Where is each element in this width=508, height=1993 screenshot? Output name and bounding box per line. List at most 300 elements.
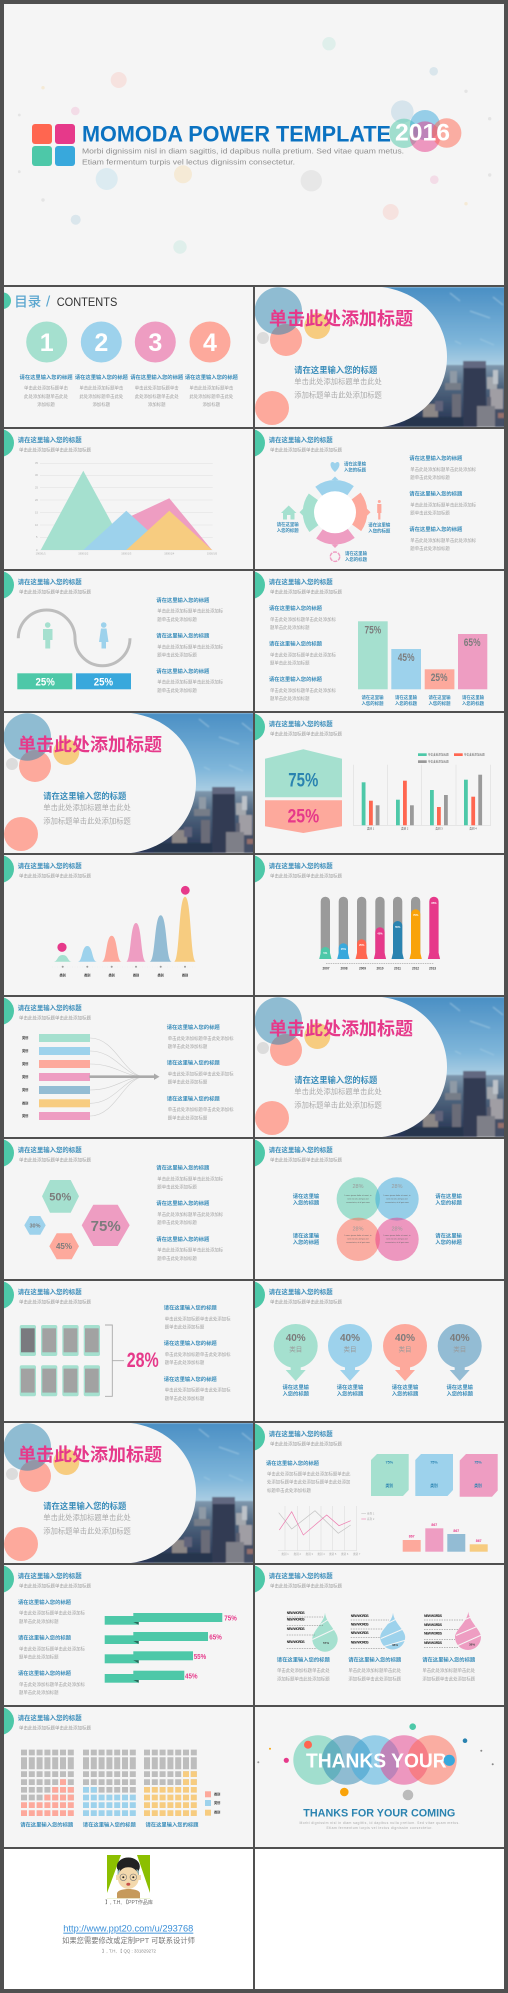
bar percentages: 65% [209, 1633, 222, 1642]
circle text: 28% [352, 1184, 364, 1190]
text block 2 [409, 490, 477, 516]
pill chart: 2007 [322, 966, 330, 970]
text block 1: 题单击此处添加标题 [270, 624, 310, 631]
slide heading [0, 1565, 91, 1593]
text block 1: 请在这里输入您的标题 [156, 1164, 210, 1172]
text block 3: 单击此处添加标题单击此处添加标 [19, 1681, 85, 1688]
slide heading: 请在这里输入您的标题 [18, 1145, 82, 1154]
small bar chart: 867 [409, 1534, 415, 1538]
cut-corner box 3: 类别 [474, 1483, 482, 1488]
ring labels: 入您的标题 [344, 466, 367, 474]
text block 3: 题单击此处添加标题 [19, 1689, 59, 1696]
circle text [345, 1184, 410, 1244]
contents item 3: 添加标题 [148, 401, 166, 408]
main title: MOMODA POWER TEMPLATE [82, 121, 391, 146]
drop caption 2: 添加标题单击此处添加标题 [348, 1675, 402, 1682]
text block 3: 题单击此处添加标题 [165, 1395, 205, 1402]
area chart [35, 461, 218, 556]
text block 1: 题单击此处添加标题 [157, 1184, 197, 1190]
hexagon 50%: 50% [49, 1192, 72, 1204]
contact note: 如果您需要修改或定制PPT 可联系设计师 [62, 1936, 195, 1945]
text block 3: 题单击此处添加标题 [168, 1114, 208, 1121]
text block 3 [167, 1094, 234, 1121]
cover text: 单击此处添加标题单击此处 [43, 1513, 132, 1522]
text block: 请在这里输入您的标题 [266, 1459, 320, 1467]
pill chart: 55% [395, 925, 401, 929]
logo squares [32, 124, 75, 166]
column chart: 75% [364, 624, 381, 636]
text block 2: 请在这里输入您的标题 [167, 1059, 220, 1067]
slide heading [237, 1281, 342, 1309]
pin 3: 入您的标题 [392, 1390, 419, 1398]
slide heading: 单击此处添加标题单击此处添加标题 [270, 446, 342, 454]
text block 1: 请在这里输入您的标题 [167, 1023, 220, 1031]
panel: hexagon slide [4, 1139, 253, 1279]
cover text: 添加标题单击此处添加标题 [43, 816, 132, 826]
column chart: 入您的标题 [429, 700, 451, 707]
slide heading: 单击此处添加标题单击此处添加标题 [270, 1582, 342, 1590]
slide heading: 单击此处添加标题单击此处添加标题 [270, 588, 342, 596]
contents item 2: 请在这里输入您的标题 [75, 373, 128, 381]
drop 1: NEW WORDS [287, 1640, 305, 1644]
contents item 3: 请在这里输入您的标题 [130, 373, 184, 381]
pin 3: 40% [395, 1333, 415, 1344]
pin 2 [328, 1324, 372, 1398]
text block 3: 题单击此处添加标题 [410, 545, 450, 552]
drop 2: NEW WORDS [351, 1631, 369, 1635]
slide heading [0, 1139, 91, 1167]
contents heading: / [46, 294, 51, 311]
drop 2: NEW WORDS [351, 1622, 369, 1626]
drop caption 1 [277, 1656, 330, 1682]
text block 2: 单击此处添加标题单击此处添加标 [270, 651, 336, 658]
ribbon bars [105, 1613, 222, 1683]
panel: designer credits [4, 1849, 253, 1989]
pill chart [319, 897, 440, 970]
cover text: 添加标题单击此处添加标题 [294, 1100, 383, 1110]
panel: area chart slide [4, 429, 253, 569]
circle labels: 入您的标题 [293, 1238, 320, 1246]
bell chart: 类别 [133, 972, 139, 978]
slide heading: 请在这里输入您的标题 [18, 861, 82, 870]
circle text: Lorem ipsum dolor sit amet, in [384, 1194, 410, 1197]
drop caption 3: 请在这里输入您的标题 [422, 1656, 476, 1664]
text block 2: 单击此处添加标题单击此处添加标 [410, 501, 477, 508]
numbered circles [26, 322, 231, 362]
slide heading [0, 855, 91, 883]
text block 3: 单击此处添加标题单击此处添加标 [270, 687, 336, 694]
slide heading [0, 571, 91, 599]
contents item 2 [75, 373, 128, 408]
cover text: 请在这里输入您的标题 [43, 791, 127, 801]
decorative faint dots [18, 37, 491, 254]
cut-corner box 1: 75% [385, 1460, 394, 1464]
panel: converging bars slide [4, 997, 253, 1137]
badge 25%: 25% [288, 806, 319, 827]
text block 1 [409, 454, 477, 481]
contents item 4: 添加标题 [203, 401, 221, 408]
waffle 1 [21, 1752, 74, 1813]
cover text: 请在这里输入您的标题 [43, 1501, 127, 1511]
area chart: 1900/1/3 [121, 552, 132, 556]
drop caption 1: 添加标题单击此处添加标题 [277, 1675, 330, 1682]
small bar chart: 867 [476, 1539, 482, 1543]
text block 1: 题单击此处添加标题 [165, 1324, 205, 1330]
ring labels: 请在这里输 [277, 521, 299, 528]
slide heading [237, 1139, 342, 1167]
cut-corner box 1: 类别 [386, 1483, 393, 1488]
icon: heart [331, 462, 339, 472]
text block 3: 单击此处添加标题单击此处添加标 [157, 1247, 224, 1254]
slide heading: 单击此处添加标题单击此处添加标题 [270, 1156, 342, 1164]
link text: http://www.ppt20.com/u/293768 [63, 1924, 193, 1935]
panel: wave people slide [4, 571, 253, 711]
text block 2: 请在这里输入您的标题 [269, 640, 323, 648]
slide heading: 请在这里输入您的标题 [269, 719, 333, 728]
text block 3: 题单击此处添加标题 [157, 1255, 197, 1262]
slide heading: 请在这里输入您的标题 [269, 1429, 333, 1438]
cut-corner box 2 [415, 1454, 453, 1496]
bar percentages: 55% [194, 1652, 206, 1661]
text block 1: 题单击此处添加标题 [157, 616, 197, 623]
category bars and connectors: 类别 [22, 1048, 28, 1053]
drop 2 [351, 1613, 406, 1650]
slide heading: 请在这里输入您的标题 [18, 1713, 82, 1722]
text block 3 [269, 675, 336, 702]
text block 2: 题单击此处添加标题 [270, 659, 310, 666]
line chart: 类别 1 [281, 1552, 289, 1556]
small bar chart [403, 1523, 488, 1552]
circle labels: 请在这里输 [435, 1192, 462, 1200]
drop 3: NEW WORDS [424, 1641, 443, 1645]
numbered circles: 4 [203, 329, 217, 357]
area chart: 10 [35, 523, 38, 527]
hexagon 30% [24, 1216, 46, 1235]
grouped bar chart: 类别 2 [401, 827, 409, 831]
area chart: 1900/1/5 [207, 552, 218, 556]
slide heading [0, 429, 91, 457]
arrow [89, 1074, 160, 1080]
text block 2: 题单击此处添加标题 [157, 1219, 197, 1226]
thanks title: THANKS YOUR [306, 1750, 447, 1772]
avatar [107, 1855, 150, 1898]
text block 2: 题单击此处添加标题 [157, 651, 197, 658]
area chart: 5 [36, 535, 38, 539]
pill chart: 2010 [376, 966, 384, 970]
text block 3: 请在这里输入您的标题 [18, 1669, 72, 1677]
big percentage: 28% [127, 1349, 159, 1372]
contents item 1: 请在这里输入您的标题 [20, 373, 73, 381]
drop 2: NEW WORDS [351, 1614, 369, 1618]
text block 1: 题单击此处添加标题 [410, 474, 450, 481]
pill chart: 85% [431, 901, 437, 905]
text block 3: 单击此处添加标题单击此处添加标 [168, 1106, 234, 1113]
category bars and connectors: 类别 [22, 1113, 28, 1118]
text block 2 [167, 1059, 234, 1086]
contents item 3: 单击此处添加标题单击 [135, 384, 179, 391]
drop caption 2 [348, 1656, 402, 1682]
drop 2: NEW WORDS [351, 1640, 369, 1644]
panel: section cover 4 [4, 1423, 253, 1563]
waffle captions: 请在这里输入您的标题 [20, 1821, 74, 1829]
slide heading: 单击此处添加标题单击此处添加标题 [19, 588, 91, 596]
column chart: 入您的标题 [362, 700, 384, 707]
slide heading [0, 997, 91, 1025]
slide heading: 请在这里输入您的标题 [269, 1145, 333, 1154]
waffle captions [20, 1821, 199, 1829]
pin 4: 入您的标题 [446, 1390, 474, 1398]
waffle 2 [83, 1752, 136, 1813]
text block 1: 单击此处添加标题单击此处添加标 [165, 1315, 231, 1322]
category bars and connectors: 类别 [22, 1074, 28, 1079]
text block 1 [18, 1598, 85, 1625]
subtitle [82, 148, 404, 166]
contents item 4: 单击此处添加标题单击 [189, 384, 234, 391]
drop caption 3 [422, 1656, 476, 1682]
area chart: 25 [35, 486, 38, 490]
panel: bell chart slide [4, 855, 253, 995]
text block 1: 题单击此处添加标题 [168, 1043, 208, 1050]
numbered circles: 1 [40, 329, 54, 357]
text block 2: 单击此处添加标题单击此处添加标 [19, 1645, 85, 1652]
pin 4: 40% [450, 1333, 470, 1344]
pill chart: 25% [359, 943, 365, 947]
icon: green person [43, 622, 52, 648]
text block 1: 单击此处添加标题单击此处添加标 [168, 1035, 234, 1042]
cover text [294, 1075, 383, 1110]
text block 3 [156, 667, 224, 694]
cover text [43, 791, 132, 826]
slide heading: 请在这里输入您的标题 [18, 1287, 82, 1296]
circle labels: 请在这里输 [293, 1192, 320, 1200]
text block 2: 题单击此处添加标题 [165, 1359, 205, 1366]
contents item 1: 单击此处添加标题单击 [24, 384, 69, 391]
text block 1 [269, 604, 336, 631]
circle text: 28% [352, 1226, 364, 1232]
waffle legend: 类别 [214, 1792, 220, 1797]
drop 3 [424, 1612, 482, 1650]
slide heading: 单击此处添加标题单击此处添加标题 [19, 1298, 91, 1306]
drop caption 3: 单击此处添加标题单击此处 [422, 1667, 476, 1674]
icon: blue person [99, 622, 108, 648]
cover text: 单击此处添加标题单击此处 [294, 1087, 383, 1096]
circle labels: 入您的标题 [435, 1198, 462, 1206]
chart legend: 单击此处添加标题 [464, 753, 485, 757]
column chart: 65% [464, 637, 481, 649]
contents item 2: 此处添加标题单击此处 [79, 393, 124, 400]
panel: water drops slide [255, 1565, 504, 1705]
circle text: Lorem ipsum dolor sit amet, in [345, 1194, 371, 1197]
drop caption 2: 单击此处添加标题单击此处 [348, 1667, 402, 1674]
drop 3: 38% [469, 1642, 475, 1646]
text block 2 [156, 632, 224, 658]
city photo [104, 713, 254, 853]
bell chart: 类别 [182, 972, 188, 978]
pill chart: 5% [323, 951, 328, 955]
hexagon 30%: 30% [29, 1223, 41, 1229]
circle text: consectetur, ut id quis sem [385, 1241, 409, 1244]
drop 1 [287, 1611, 338, 1652]
contents item 2: 添加标题 [93, 401, 111, 408]
waffle legend: 类别 [214, 1800, 220, 1805]
circle labels [293, 1192, 462, 1246]
badge 75%: 75% [288, 770, 318, 791]
text block 3: 请在这里输入您的标题 [269, 675, 323, 683]
slide heading: 单击此处添加标题单击此处添加标题 [19, 446, 91, 454]
year circles [389, 100, 461, 152]
line chart: 类别 7 [353, 1552, 361, 1556]
text block 3: 请在这里输入您的标题 [156, 1235, 210, 1243]
slide heading [237, 1565, 342, 1593]
cover text [294, 365, 383, 400]
subtitle: Etiam fermentum turpis vel lectus dignissim consectetur. [82, 159, 295, 166]
waffle captions: 请在这里输入您的标题 [83, 1821, 136, 1829]
slide heading: 请在这里输入您的标题 [269, 1287, 333, 1296]
slide heading [237, 713, 342, 741]
text block 1 [164, 1304, 231, 1330]
slide heading [237, 429, 342, 457]
text block 2 [18, 1634, 85, 1660]
text block 2: 单击此处添加标题单击此处添加标 [168, 1070, 234, 1077]
text block 3: 请在这里输入您的标题 [164, 1375, 217, 1383]
text block 3 [156, 1235, 224, 1262]
panel: thanks slide [255, 1707, 504, 1847]
white curved panel [4, 713, 196, 853]
slide heading: 单击此处添加标题单击此处添加标题 [19, 872, 91, 880]
thanks body: Morbi dignissim nisl in diam sagittis, id dapibus nulla pretium. Sed vitae quam metus. [300, 1821, 460, 1825]
text block [266, 1459, 351, 1494]
thanks body: Etiam fermentum turpis vel lectus dignissim consectetur. [326, 1826, 433, 1830]
slide heading: 单击此处添加标题单击此处添加标题 [270, 1440, 342, 1448]
chart legend [418, 753, 485, 764]
panel: section cover 1 [255, 287, 504, 427]
text block 1: 单击此处添加标题单击此处添加标 [410, 466, 477, 473]
area chart: 1900/1/4 [164, 552, 175, 556]
contents item 2: 单击此处添加标题单击 [79, 384, 124, 391]
bar percentages: 45% [185, 1671, 198, 1680]
slide heading: 单击此处添加标题单击此处添加标题 [19, 1156, 91, 1164]
overlapping circles [337, 1177, 419, 1261]
pin 3 [383, 1324, 427, 1398]
text block 2: 请在这里输入您的标题 [156, 1199, 210, 1207]
category bars and connectors: 类别 [22, 1035, 28, 1040]
contents item 4 [185, 373, 238, 408]
white curved panel [255, 287, 447, 427]
cover title: 单击此处添加标题 [18, 1445, 162, 1465]
category bars and connectors: 类别 [22, 1061, 28, 1066]
slide heading: 单击此处添加标题单击此处添加标题 [270, 1298, 342, 1306]
ring labels: 请在这里输 [344, 460, 367, 468]
text block: 处添加标题单击此处添加标题单击此处添加 [267, 1479, 350, 1486]
slide heading [0, 1707, 91, 1735]
numbered circles: 3 [148, 329, 162, 357]
circle labels: 请在这里输 [435, 1231, 462, 1239]
ring labels [277, 460, 391, 563]
year: 2016 [395, 120, 450, 146]
contents item 1 [20, 373, 73, 408]
drop 1: NEW WORDS [287, 1611, 305, 1615]
text block 1: 单击此处添加标题单击此处添加标 [270, 616, 336, 623]
pill chart: 2012 [412, 966, 419, 970]
slide heading: 请在这里输入您的标题 [269, 861, 333, 870]
cover circles [255, 287, 330, 425]
slide heading: 单击此处添加标题单击此处添加标题 [270, 730, 342, 738]
hexagon 45% [49, 1233, 79, 1259]
text block 3: 请在这里输入您的标题 [156, 667, 210, 675]
drop 1: NEW WORDS [287, 1618, 305, 1622]
cover circles [4, 713, 79, 851]
cut-corner box 2: 75% [430, 1460, 438, 1464]
qq line: 】, T.H, 【 QQ : 331829272 [102, 1948, 157, 1954]
circle text: 28% [391, 1226, 403, 1232]
pill chart: 2011 [394, 966, 401, 970]
circle text: Lorem ipsum dolor sit amet, in [345, 1234, 371, 1237]
slide heading: 单击此处添加标题单击此处添加标题 [270, 872, 342, 880]
waffle legend [205, 1791, 220, 1816]
slide heading: 请在这里输入您的标题 [18, 577, 82, 586]
circle text: sem nisi id a tempus est [386, 1238, 408, 1240]
text block 1: 请在这里输入您的标题 [269, 604, 323, 612]
circle labels: 入您的标题 [293, 1198, 320, 1206]
circle text: sem nisi id a tempus est [347, 1238, 369, 1240]
thanks subtitle: THANKS FOR YOUR COMING [303, 1807, 455, 1819]
line chart [278, 1506, 375, 1556]
text block 2 [156, 1199, 224, 1226]
city photo [104, 1423, 254, 1563]
text block 2: 题单击此处添加标题 [168, 1078, 208, 1085]
ring labels: 请在这里输 [368, 522, 391, 528]
pill chart: 40% [377, 932, 383, 936]
slide heading [237, 855, 342, 883]
drop 1: NEW WORDS [287, 1627, 305, 1631]
text block 3: 单击此处添加标题单击此处添加标 [165, 1387, 231, 1394]
panel: contents [4, 287, 253, 427]
city photo [355, 997, 505, 1137]
contents item 1: 添加标题 [37, 401, 55, 408]
pin 1: 入您的标题 [282, 1390, 310, 1398]
pin 1: 40% [286, 1333, 306, 1344]
column chart [358, 621, 487, 707]
panel: phones slide [4, 1281, 253, 1421]
contents item 1: 此处添加标题单击此处 [24, 393, 69, 400]
drop 3: NEW WORDS [424, 1632, 443, 1636]
slide heading: 请在这里输入您的标题 [269, 577, 333, 586]
slide heading: 请在这里输入您的标题 [18, 435, 82, 444]
text block: 单击此处添加标题单击此处添加标题单击此 [267, 1470, 351, 1477]
subtitle: Morbi dignissim nisl in diam sagittis, id dapibus nulla pretium. Sed vitae quam metus. [82, 148, 404, 156]
pill chart: 2008 [340, 966, 348, 970]
cover title: 单击此处添加标题 [269, 309, 413, 329]
text block: 标题单击此处添加标题 [267, 1487, 312, 1494]
text block 3: 请在这里输入您的标题 [409, 525, 463, 533]
badge 25% [265, 800, 342, 833]
cover text: 单击此处添加标题单击此处 [43, 803, 132, 812]
cover text: 添加标题单击此处添加标题 [294, 390, 383, 400]
cover circles [255, 997, 330, 1135]
ring labels: 入您的标题 [277, 527, 299, 534]
pin 2: 入您的标题 [337, 1390, 364, 1398]
small bar chart: 867 [453, 1529, 459, 1533]
contents item 3: 此处添加标题单击此处 [135, 393, 179, 400]
drop caption 1: 请在这里输入您的标题 [277, 1656, 330, 1664]
bracket [105, 1325, 124, 1396]
drop 3: NEW WORDS [424, 1623, 443, 1627]
text block 1: 单击此处添加标题单击此处添加标 [19, 1610, 85, 1617]
confetti dots [257, 1723, 494, 1800]
pin 4: 类目 [453, 1345, 466, 1354]
panel: pill chart slide [255, 855, 504, 995]
text block 2: 请在这里输入您的标题 [156, 632, 210, 640]
